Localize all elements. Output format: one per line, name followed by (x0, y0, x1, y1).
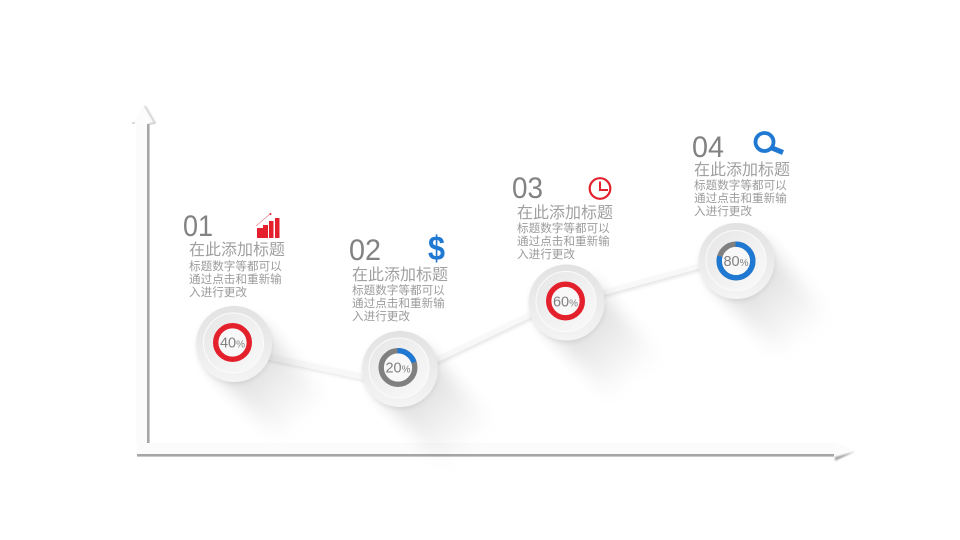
text block 02: 通过点击和重新输 (352, 296, 445, 310)
disc 4 (698, 223, 774, 299)
text block 02: 标题数字等都可以 (352, 283, 445, 297)
text block 03: 标题数字等都可以 (517, 221, 610, 235)
text block 04 (692, 131, 790, 218)
text block 02: 入进行更改 (352, 309, 410, 323)
donut 40%: 40% (220, 336, 245, 352)
text block 01: 01 (183, 210, 213, 243)
connecting trend line (234, 256, 736, 386)
icon: magnifier (756, 133, 783, 152)
disc 2 (362, 331, 438, 407)
text block 03: 通过点击和重新输 (517, 234, 610, 248)
horizontal axis arrow (137, 441, 856, 461)
text block 04: 通过点击和重新输 (694, 191, 787, 205)
node 3 (528, 264, 661, 403)
node 2 (362, 331, 495, 469)
disc 1 (196, 306, 272, 382)
long shadow 2 (375, 347, 495, 469)
text block 01: 在此添加标题 (189, 241, 285, 259)
text block 03: 入进行更改 (517, 247, 575, 261)
text block 04: 入进行更改 (694, 204, 752, 218)
text block 03: 在此添加标题 (517, 204, 613, 222)
donut 80%: 80% (723, 254, 749, 270)
text block 01 (183, 210, 285, 299)
text block 02: 02 (349, 234, 381, 267)
text block 04: 标题数字等都可以 (694, 178, 787, 192)
vertical axis arrow (132, 105, 155, 444)
donut 20%: 20% (385, 360, 411, 376)
text block 02 (349, 234, 448, 323)
node 1 (196, 306, 329, 444)
icon: dollar: $ (428, 230, 445, 268)
node 4 (698, 223, 831, 361)
text block 01: 标题数字等都可以 (189, 259, 282, 273)
text block 02: 在此添加标题 (352, 266, 448, 284)
text block 01: 通过点击和重新输 (189, 272, 282, 286)
long shadow 4 (712, 239, 831, 361)
text block 04: 04 (692, 131, 724, 164)
text block 03 (512, 172, 613, 261)
text block 04: 在此添加标题 (694, 161, 790, 179)
disc 3 (528, 264, 604, 340)
long shadow 3 (542, 280, 661, 403)
donut 60%: 60% (553, 294, 578, 310)
text block 01: 入进行更改 (189, 285, 247, 299)
text block 03: 03 (512, 172, 543, 205)
icon: rising bars (256, 213, 280, 238)
long shadow 1 (209, 322, 329, 444)
icon: clock (590, 178, 610, 199)
